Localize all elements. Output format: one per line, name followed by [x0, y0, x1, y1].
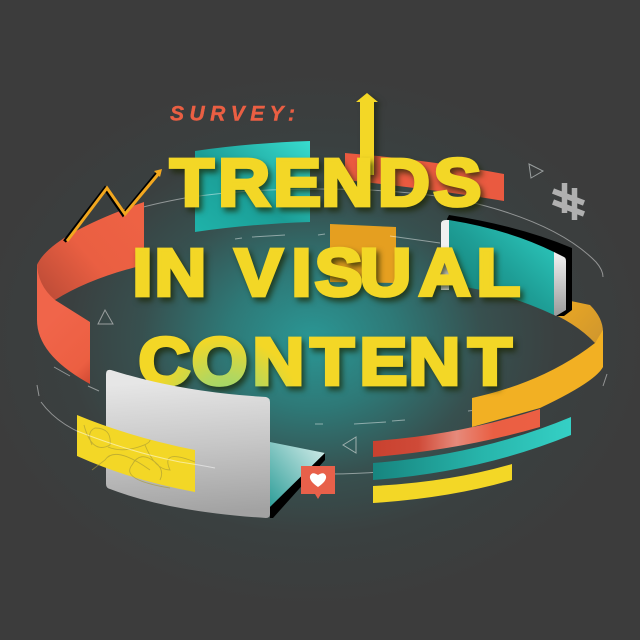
orbit lines — [37, 189, 607, 474]
label: survey: SURVEY: — [170, 102, 295, 126]
stripe: teal — [373, 417, 571, 480]
icon: triangle up — [98, 310, 113, 324]
panel: teal rectangle — [195, 141, 310, 232]
title: TRENDS — [170, 145, 481, 220]
stripe: red — [373, 409, 540, 457]
title: CONTENT — [138, 324, 512, 399]
device: laptop — [106, 370, 325, 518]
ribbon: red — [37, 202, 144, 384]
title: IN VISUAL — [132, 235, 520, 310]
panel: yellow squiggle card — [77, 415, 215, 492]
chart line icon — [64, 169, 162, 242]
panel: orange square — [330, 224, 396, 283]
title — [132, 145, 520, 399]
ribbon: gold — [472, 300, 603, 427]
icon: hashtag — [553, 183, 584, 220]
panel: red banner — [345, 153, 504, 201]
icon: play triangle — [529, 164, 543, 178]
arrow: up — [356, 93, 378, 175]
icon: heart notification — [301, 466, 335, 499]
stripe: yellow — [373, 464, 512, 503]
device: phone — [441, 215, 572, 316]
icon: triangle left — [343, 437, 356, 453]
